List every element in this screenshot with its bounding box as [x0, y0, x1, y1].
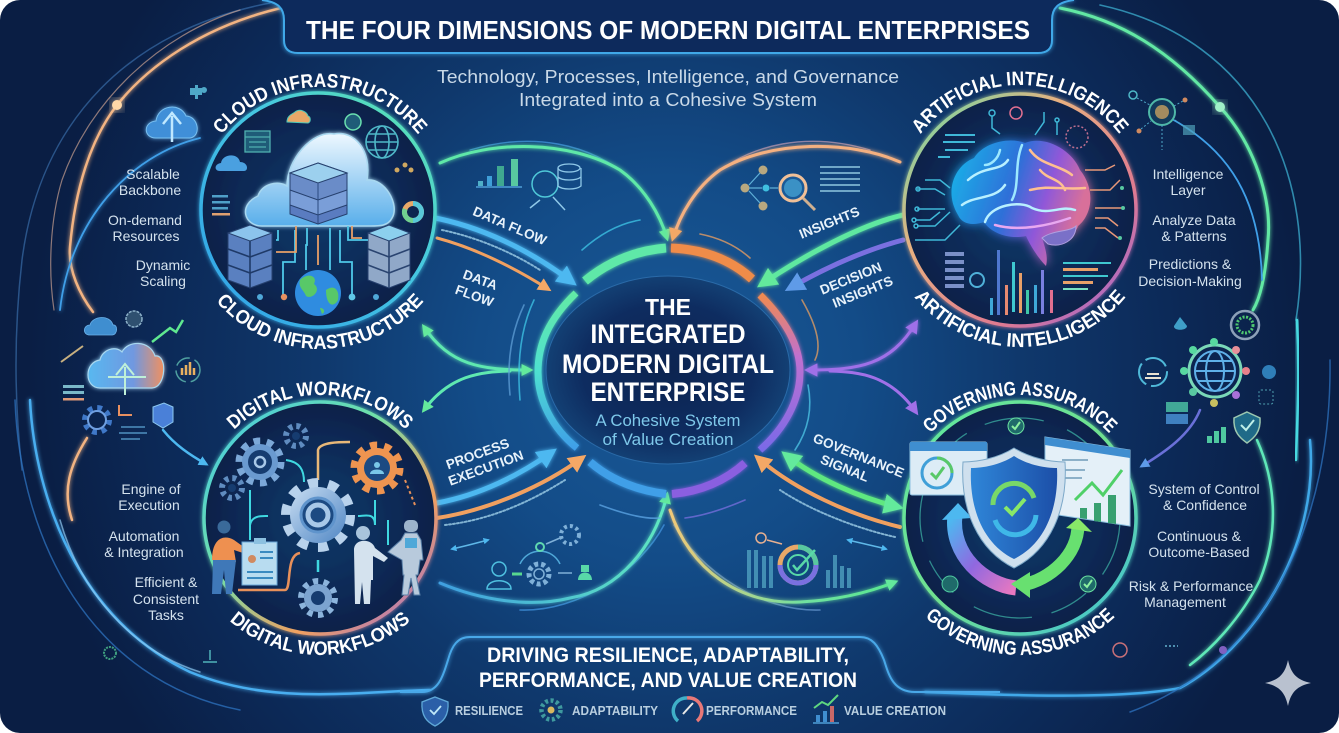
- text: cloud features: Scalable: [126, 166, 180, 182]
- icon: left ring: [1139, 358, 1167, 386]
- text: cloud features: Resources: [113, 228, 179, 244]
- text: cloud features: Backbone: [119, 182, 181, 198]
- text: workflow features: [104, 481, 199, 623]
- heading: cloud infrastructure bottom: CLOUD INFRASTRUCTURE: [218, 292, 424, 349]
- ring segment top left: [585, 248, 666, 281]
- data dots lower right: [780, 490, 895, 537]
- top nodes: [989, 107, 1088, 148]
- icon: left server: [228, 225, 272, 288]
- icon: right server: [368, 225, 410, 288]
- subtitle: Technology, Processes, Intelligence, and Governance: [437, 67, 899, 87]
- circuit traces right: [1085, 165, 1125, 240]
- cerebellum: [1042, 226, 1076, 245]
- icon: left window: [910, 442, 987, 495]
- ring: [204, 402, 436, 634]
- data table: [945, 252, 964, 288]
- icon: bars ring: [176, 358, 200, 382]
- text: governance features: Risk & Performance: [1129, 578, 1253, 594]
- icon: badge right: [1113, 643, 1127, 657]
- arrow: data flow blue: [430, 217, 572, 282]
- text: governance features: Management: [1144, 594, 1226, 610]
- icon: mini bars: [1207, 427, 1226, 443]
- inner ring: [920, 418, 1120, 618]
- arrow: governance green: [786, 455, 898, 507]
- data dots upper left: [442, 230, 540, 270]
- hub title: THE: [645, 294, 691, 320]
- icon cluster: left cloud: [61, 311, 200, 439]
- central flows: [163, 141, 1200, 610]
- text: governance features: System of Control: [1148, 481, 1260, 497]
- check badge lower left: [942, 576, 958, 592]
- network dots: [257, 294, 379, 300]
- icon: table: [1166, 402, 1188, 424]
- legend: resilience: [422, 697, 523, 726]
- icon: status dots: [394, 162, 414, 172]
- bottom corner icons: [104, 643, 1227, 662]
- text: cloud features: [108, 166, 190, 289]
- arrow: cluster to workflows: [163, 430, 206, 464]
- arrow: left double: [424, 327, 530, 370]
- heading: cloud infrastructure top: CLOUD INFRASTRUCTURE: [214, 74, 428, 134]
- icon: small teal node top: [190, 85, 207, 99]
- icon: rising line: [152, 320, 183, 342]
- icon: gauge ring: [126, 311, 142, 327]
- label: governance signal: SIGNAL: [818, 452, 871, 485]
- bottom panel: [400, 637, 1000, 726]
- icon: main gear: [286, 483, 350, 547]
- icon: neural chip: [1129, 91, 1195, 150]
- text: governance features: & Confidence: [1163, 497, 1247, 513]
- arrow: small double lower left: [452, 540, 488, 549]
- arrow: left double lower: [424, 371, 510, 410]
- icon: donut: [404, 204, 422, 221]
- arc: bottom right gold-green: [670, 510, 895, 602]
- icons: top left analytics: [476, 159, 581, 210]
- text: ai features: Intelligence: [1153, 166, 1224, 182]
- icons: bottom right gauge: [747, 533, 851, 588]
- text: workflow features: & Integration: [104, 544, 184, 560]
- text: governance features: [1129, 481, 1260, 610]
- text: ai features: Decision-Making: [1138, 273, 1242, 289]
- icon: arrowhead left loop: [942, 503, 972, 520]
- icon: data rows: [212, 195, 230, 216]
- arc: bottom right thin: [674, 525, 820, 610]
- heading: artificial intelligence top: ARTIFICIAL INTELLIGENCE: [913, 72, 1130, 134]
- arrow: data flow orange: [437, 238, 548, 289]
- arc: bottom left teal: [440, 495, 667, 602]
- label: data flow lower: FLOW: [453, 282, 496, 310]
- ring segment bottom left: [590, 462, 666, 494]
- icon: arrowhead right loop: [1066, 518, 1092, 532]
- icon: earth: [295, 270, 341, 316]
- icon cluster: right globe: [1139, 311, 1276, 443]
- circuit traces left: [912, 180, 960, 240]
- brain folds: [962, 145, 1085, 228]
- arrow: small double lower right: [848, 540, 886, 549]
- legend: value creation: [813, 695, 946, 723]
- icon: arrow right loop: [1022, 525, 1078, 585]
- legend: adaptability: ADAPTABILITY: [572, 703, 658, 718]
- hub title: INTEGRATED: [590, 319, 746, 349]
- icons: top right network: [740, 166, 860, 210]
- icon: small gear left: [222, 478, 242, 498]
- label: process execution: PROCESS: [444, 436, 511, 472]
- panel: artificial intelligence: [904, 94, 1136, 326]
- label: data flow lower: [453, 266, 502, 310]
- subtitle: Integrated into a Cohesive System: [519, 90, 817, 110]
- hub subtitle: A Cohesive System: [596, 411, 740, 430]
- text: workflow features: Engine of: [121, 481, 181, 497]
- icon: blue ball: [1262, 365, 1276, 379]
- text: ai features: [1138, 166, 1242, 289]
- label: decision insights: DECISION: [818, 259, 884, 298]
- arrow: governance orange: [758, 458, 900, 527]
- bar chart: [990, 250, 1053, 315]
- icon: small rows: [119, 427, 147, 439]
- arrow: cluster to governance: [1142, 410, 1200, 466]
- ring: [201, 93, 435, 327]
- icon: arrow left loop: [955, 515, 1016, 588]
- heading: governing assurance bottom: GOVERNING ASSURANCE: [928, 607, 1115, 656]
- hub title: MODERN DIGITAL: [562, 349, 774, 379]
- flow labels: [441, 204, 906, 496]
- label: governance signal: GOVERNANCE: [811, 430, 906, 481]
- hub subtitle: of Value Creation: [602, 430, 734, 449]
- icon: dotted chip: [1259, 390, 1273, 404]
- text: workflow features: Efficient &: [135, 574, 198, 590]
- node circle: [970, 273, 984, 287]
- panel frame: [400, 637, 1000, 692]
- central hub: [538, 248, 800, 494]
- text: workflow features: Consistent: [133, 591, 199, 607]
- arc: bottom left thin: [520, 525, 664, 610]
- ring: [904, 94, 1136, 326]
- arrow: right double: [808, 323, 916, 370]
- ring segment left: [538, 293, 577, 448]
- ring: [904, 402, 1136, 634]
- label: insights: INSIGHTS: [797, 204, 862, 242]
- top data lines: [938, 135, 975, 157]
- hub core: [546, 276, 790, 464]
- icon: bottom gear: [301, 581, 335, 615]
- data dots lower left: [445, 480, 565, 525]
- heading: artificial intelligence bottom: ARTIFICIAL INTELLIGENCE: [914, 288, 1126, 348]
- text: workflow features: Automation: [109, 528, 179, 544]
- text: workflow features: Execution: [118, 497, 180, 513]
- text: governance features: Outcome-Based: [1148, 544, 1250, 560]
- horizontal bars: [1063, 262, 1111, 290]
- label: process execution: [441, 432, 525, 489]
- icon: window: [245, 131, 270, 152]
- text: ai features: Predictions &: [1149, 256, 1232, 272]
- hub nodes: [1180, 338, 1250, 407]
- icon: arrowhead bottom: [1011, 572, 1030, 598]
- icon: blue gear: [239, 441, 281, 483]
- icon: L connector: [119, 405, 132, 415]
- arrow: process execution orange: [437, 458, 582, 518]
- label: decision insights: INSIGHTS: [830, 273, 895, 311]
- icon: orange gear: [354, 445, 400, 491]
- heading: governing assurance top: GOVERNING ASSURANCE: [924, 382, 1118, 433]
- icon: green cluster left: [104, 647, 116, 659]
- icon: robot: [388, 520, 423, 595]
- arc: top left green: [440, 147, 667, 238]
- legend: adaptability: [542, 700, 658, 720]
- icon: shield: [963, 448, 1065, 568]
- text: ai features: Analyze Data: [1152, 212, 1236, 228]
- label: decision insights: [818, 257, 895, 313]
- icon: small cloud: [84, 317, 117, 335]
- icon: globe hub: [1189, 345, 1241, 397]
- text: ai features: Layer: [1170, 182, 1206, 198]
- label: process execution: EXECUTION: [446, 447, 525, 489]
- bottom heading: DRIVING RESILIENCE, ADAPTABILITY,: [487, 644, 849, 667]
- text: ai features: & Patterns: [1161, 228, 1227, 244]
- ring segment right: [760, 295, 800, 450]
- text: cloud features: Scaling: [140, 273, 186, 289]
- check badge top: [1008, 418, 1024, 434]
- panel: governing assurance: [904, 402, 1136, 634]
- icon: shield: [1234, 412, 1260, 443]
- icon: network left: [203, 650, 217, 662]
- arc: top right orange: [673, 146, 900, 238]
- hub title: [562, 294, 774, 407]
- icon: dots right: [1165, 645, 1178, 647]
- legend: performance: [673, 698, 797, 721]
- icons: bottom left process: [487, 526, 592, 589]
- icon: integrated cloud: [88, 343, 164, 388]
- legend: resilience: RESILIENCE: [455, 703, 523, 718]
- ring segment top right: [671, 248, 752, 279]
- arrow: decision insights purple: [790, 240, 903, 288]
- arc: top right thin: [683, 141, 870, 215]
- title: [262, 0, 1074, 53]
- icon: droplet: [1174, 317, 1187, 330]
- icon: central server stack: [290, 163, 347, 224]
- legend: value creation: VALUE CREATION: [844, 703, 946, 718]
- panel: digital workflows: [204, 402, 436, 634]
- connector lines: [276, 226, 368, 296]
- inner thin arcs: [509, 220, 818, 518]
- heading: digital workflows top: DIGITAL WORKFLOWS: [226, 381, 413, 429]
- bottom heading: PERFORMANCE, AND VALUE CREATION: [479, 669, 857, 692]
- icon: network right: [1219, 646, 1227, 654]
- icon: main cloud: [246, 133, 394, 226]
- brain: [951, 141, 1090, 266]
- check badge lower right: [1080, 576, 1096, 592]
- title: THE FOUR DIMENSIONS OF MODERN DIGITAL ENTERPRISES: [306, 15, 1030, 45]
- text: workflow features: Tasks: [148, 607, 184, 623]
- connectors: [238, 442, 415, 590]
- hub subtitle: [596, 411, 740, 449]
- arrow: insights green: [762, 215, 903, 284]
- icon: line globe: [366, 126, 398, 158]
- icon: top ring: [1231, 311, 1259, 339]
- icon: upper cloud: [287, 110, 310, 123]
- icon: link: [61, 346, 83, 362]
- icon: person orange: [212, 520, 248, 594]
- icon: layers: [153, 403, 173, 428]
- icon: person light: [354, 526, 388, 604]
- text: cloud features: Dynamic: [136, 257, 190, 273]
- arc: top left thin blue: [470, 141, 657, 215]
- icon: cross arrows: [108, 364, 146, 395]
- arrow: process execution blue: [437, 452, 552, 503]
- legend: performance: PERFORMANCE: [706, 703, 797, 718]
- icon: small badge: [345, 114, 361, 130]
- icon: text rows: [63, 385, 84, 400]
- icon: small cloud: [216, 155, 247, 171]
- icon: gemini star: [1265, 660, 1311, 706]
- icon: right window: [1045, 437, 1130, 526]
- heading: digital workflows bottom: DIGITAL WORKFLOWS: [230, 611, 409, 656]
- text: cloud features: On-demand: [108, 212, 182, 228]
- hub title: ENTERPRISE: [590, 377, 746, 407]
- text: governance features: Continuous &: [1157, 528, 1242, 544]
- icon: clipboard: [242, 538, 277, 585]
- ring segment bottom right: [672, 463, 745, 494]
- panel: cloud infrastructure: [201, 93, 435, 327]
- icon: cloud upload: [146, 107, 197, 142]
- label: data flow upper: DATA FLOW: [471, 204, 549, 248]
- icon: small gear top: [286, 426, 306, 446]
- arrow: right double lower: [830, 371, 916, 412]
- icon: gear: [85, 408, 109, 432]
- subtitle: [437, 67, 899, 110]
- bottom heading: [479, 644, 857, 692]
- label: data flow lower: DATA: [461, 267, 500, 293]
